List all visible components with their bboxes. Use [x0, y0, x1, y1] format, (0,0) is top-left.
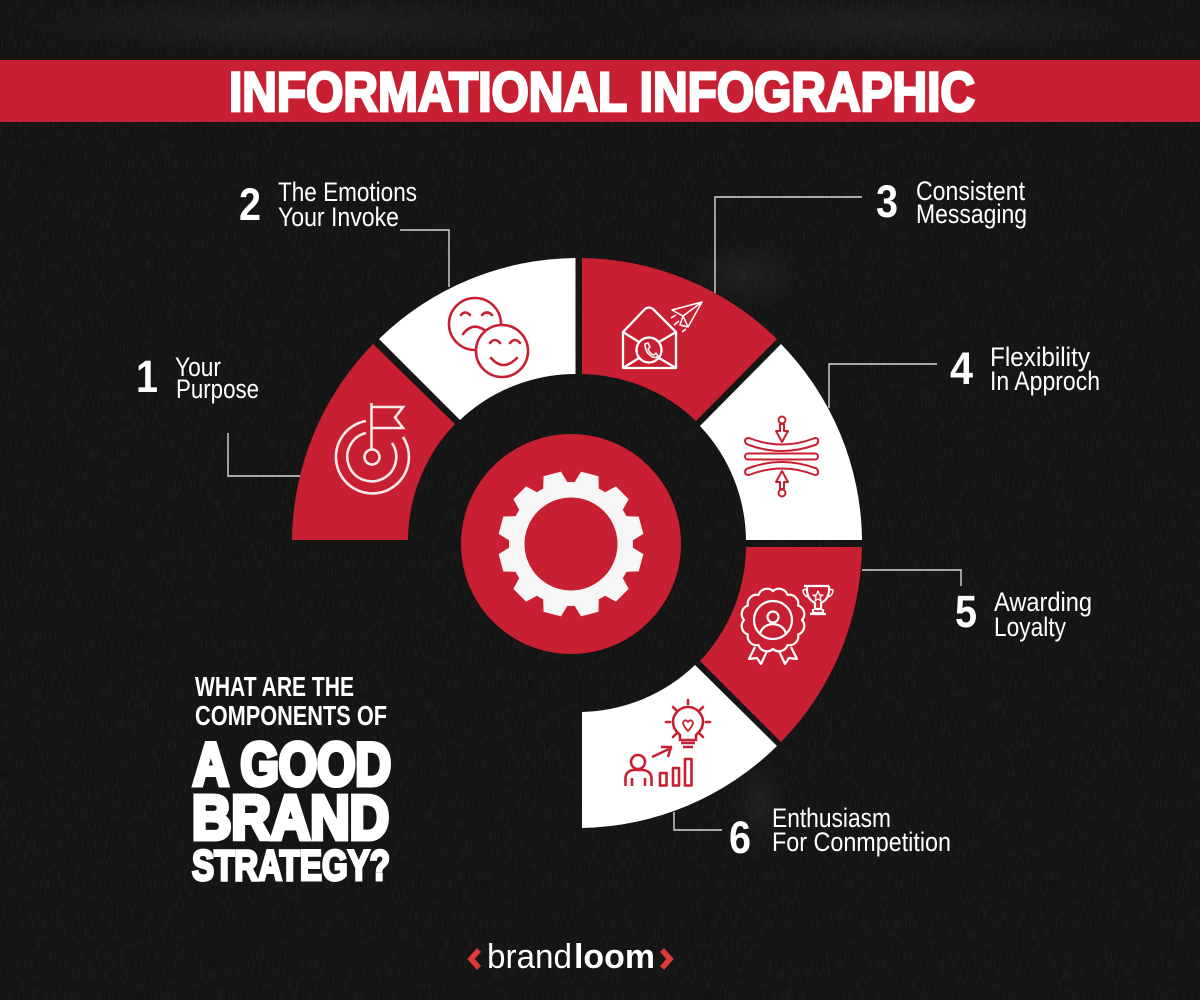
label 6: 6 [729, 812, 751, 863]
label 3: Consistent [916, 176, 1025, 206]
label 4: 4 [950, 343, 973, 394]
icon: envelope and paper plane [623, 302, 702, 368]
label 3 [876, 176, 1027, 229]
label 6: For Conmpetition [772, 827, 951, 857]
icon: rosette and trophy [742, 586, 833, 664]
title banner [0, 60, 1200, 123]
segment 4: flexibility in approach [700, 344, 862, 540]
label 5: Loyalty [994, 612, 1066, 642]
segment 6: enthusiasm for competition [582, 665, 777, 828]
label 5: Awarding [994, 587, 1092, 617]
label 2 [239, 177, 417, 232]
icon: gear [498, 471, 644, 617]
label 1: Purpose [176, 374, 259, 404]
segment 1: your purpose [292, 344, 455, 540]
label 2: The Emotions [278, 177, 417, 207]
label 6: Enthusiasm [772, 803, 891, 833]
label 2: 2 [239, 179, 261, 230]
segment 2: the emotions you invoke [379, 258, 576, 420]
icon: compressed bars with arrows [745, 416, 818, 496]
heading: what are the components [192, 671, 391, 890]
segment 5: awarding loyalty [700, 547, 862, 742]
label 4: Flexibility [990, 342, 1090, 372]
label 1: 1 [136, 351, 158, 402]
icon: target with flag [336, 403, 409, 493]
label 3: 3 [876, 176, 898, 227]
heading: what are the components: WHAT ARE THE [195, 671, 354, 702]
center gear badge [461, 434, 681, 654]
label 1: Your [175, 352, 221, 382]
heading: what are the components: A GOOD [193, 731, 391, 798]
label 4 [950, 342, 1100, 396]
segment 3: consistent messaging [582, 258, 777, 421]
heading: what are the components: BRAND [192, 784, 389, 853]
label 4: In Approch [990, 366, 1100, 396]
label 5 [955, 586, 1092, 642]
label 6 [729, 803, 951, 863]
icon: sad and happy faces [449, 298, 528, 377]
label 3: Messaging [916, 199, 1027, 229]
title: INFORMATIONAL INFOGRAPHIC [229, 60, 975, 123]
icon: person, bars and lightbulb [626, 700, 710, 786]
label 2: Your Invoke [278, 202, 399, 232]
logo: brandloom: loom [574, 938, 655, 976]
logo: brandloom [471, 938, 670, 976]
heading: what are the components: COMPONENTS OF [195, 700, 387, 731]
heading: what are the components: STRATEGY? [192, 842, 390, 890]
label 5: 5 [955, 586, 977, 637]
logo: brandloom: brand [487, 938, 572, 976]
leader lines [228, 197, 961, 830]
label 1 [136, 351, 259, 404]
